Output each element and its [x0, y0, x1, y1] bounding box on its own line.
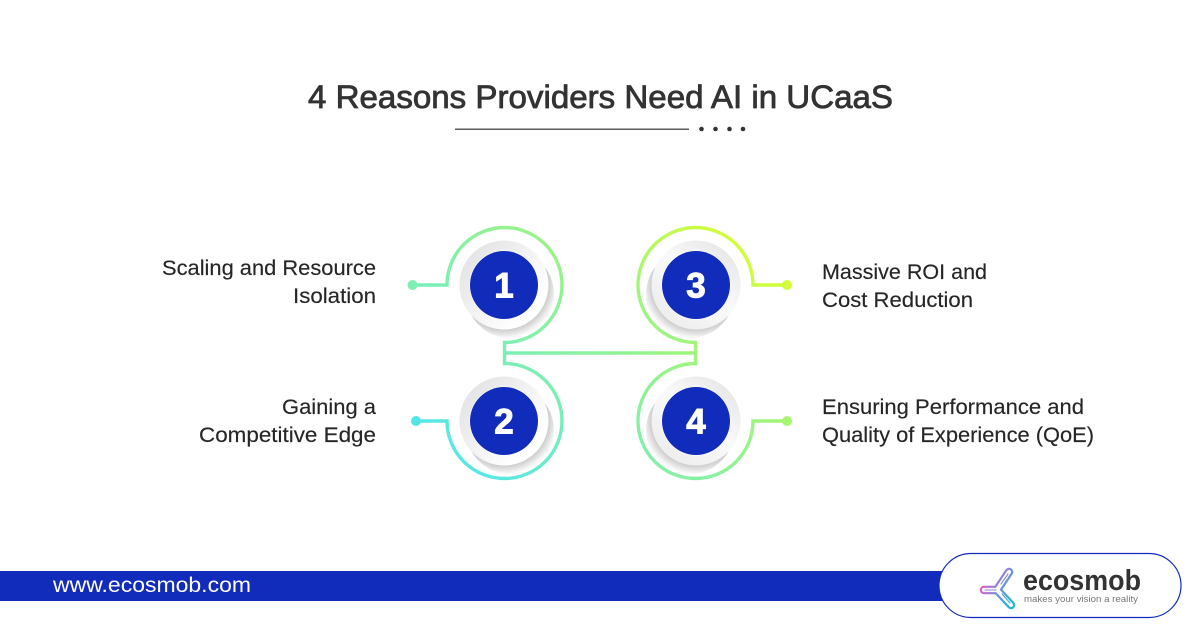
- wire: item 2: [416, 353, 562, 478]
- connector wires: [412, 227, 787, 478]
- badge 3: [646, 240, 740, 338]
- footer bar: [0, 571, 950, 601]
- badge 2: [460, 376, 554, 474]
- label: item 3: [822, 261, 987, 312]
- label: item 4: Ensuring Performance and: [822, 396, 1084, 419]
- logo wordmark: makes your vision a reality: [1024, 594, 1138, 605]
- footer url: www.ecosmob.com: [52, 574, 251, 597]
- label: item 2: Gaining a: [282, 396, 376, 419]
- wire: item 1: [412, 227, 562, 353]
- wire: item 4: [638, 353, 787, 478]
- label: item 1: Isolation: [293, 285, 376, 308]
- badge 2: 2: [494, 402, 514, 442]
- label: item 4: [822, 396, 1094, 447]
- logo icon: [984, 572, 1011, 605]
- dot: item 4: [782, 416, 792, 426]
- label: item 3: Cost Reduction: [822, 289, 973, 312]
- logo wordmark: ecosmob: [1023, 565, 1141, 597]
- badge 1: 1: [494, 266, 514, 306]
- badge 3: 3: [686, 266, 706, 306]
- dot: item 1: [408, 280, 418, 290]
- title: 4 Reasons Providers Need AI in UCaaS: [308, 79, 893, 115]
- dot: item 2: [411, 416, 421, 426]
- dot: item 3: [782, 280, 792, 290]
- title divider: [455, 127, 745, 131]
- badge 1: [460, 240, 554, 338]
- label: item 2: [199, 396, 376, 447]
- label: item 3: Massive ROI and: [822, 261, 987, 284]
- badge 4: [646, 376, 740, 474]
- logo pill: [939, 554, 1181, 618]
- label: item 1: Scaling and Resource: [162, 257, 376, 280]
- wire: horizontal link: [504, 351, 696, 355]
- label: item 4: Quality of Experience (QoE): [822, 424, 1094, 447]
- badge 4: 4: [686, 402, 706, 442]
- label: item 1: [162, 257, 376, 308]
- label: item 2: Competitive Edge: [199, 424, 376, 447]
- wire: item 3: [638, 227, 787, 353]
